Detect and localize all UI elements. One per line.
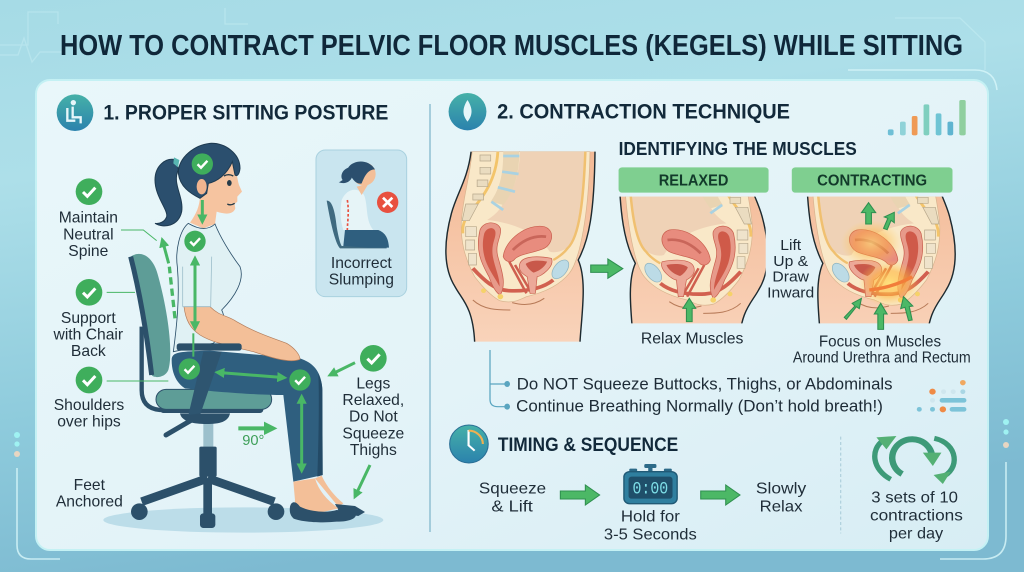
label: maintain neutral spine: Neutral (63, 226, 114, 243)
label: lift up and draw inward: Inward (767, 285, 814, 301)
icon: timer (624, 464, 677, 504)
reminder bullet list: Do NOT Squeeze Buttocks, Thighs, or Abdominals (517, 374, 893, 393)
label: shoulders over hips: over hips (57, 414, 121, 431)
label: 90 degrees: 90° (242, 433, 264, 449)
heading: contraction technique: 2. CONTRACTION TECHNIQUE (497, 99, 790, 123)
step: slowly relax: Relax (760, 498, 802, 516)
label: maintain neutral spine: Spine (68, 243, 109, 260)
label: lift up and draw inward: Draw (772, 269, 809, 286)
label: sets per day: contractions (870, 507, 963, 525)
anatomy: pelvis side view (446, 152, 595, 342)
arrow: relaxed up (683, 298, 696, 322)
icon: clock (450, 425, 488, 463)
annotation arrows (107, 200, 370, 497)
label: legs relaxed: Do Not (349, 409, 398, 426)
label: shoulders over hips: Shoulders (54, 397, 124, 414)
decorative chart bars (888, 100, 966, 135)
floor shadow (103, 507, 383, 533)
label: support with chair back: with Chair (53, 326, 123, 343)
label: focus on muscles: Around Urethra and Rectum (793, 350, 971, 367)
label: support with chair back: Support (61, 310, 116, 327)
heading: proper sitting posture: 1. PROPER SITTING POSTURE (103, 100, 388, 124)
arrow: step one (560, 485, 600, 505)
icon: repeat cycle (875, 436, 954, 484)
heading: timing and sequence: TIMING & SEQUENCE (498, 435, 678, 456)
checkmarks (76, 153, 387, 393)
callout: incorrect slumping (316, 150, 407, 297)
icon: timer: 0:00 (632, 480, 668, 499)
callout: incorrect slumping: Incorrect (331, 255, 392, 272)
label: legs relaxed: Legs (356, 375, 390, 392)
person (155, 143, 365, 522)
reminder bullet list: Continue Breathing Normally (Don’t hold breath!) (516, 396, 883, 415)
label: hold for seconds: 3-5 Seconds (604, 526, 697, 543)
callout: incorrect slumping: Slumping (329, 272, 394, 289)
step: squeeze and lift: & Lift (491, 498, 533, 516)
panel: proper sitting posture (53, 94, 407, 533)
arrow: to relaxed (591, 259, 623, 278)
step: slowly relax: Slowly (756, 480, 807, 497)
label: focus on muscles: Focus on Muscles (819, 334, 941, 351)
step: squeeze and lift: Squeeze (479, 480, 546, 497)
subheading: identifying the muscles: IDENTIFYING THE MUSCLES (619, 140, 857, 160)
label: support with chair back: Back (71, 343, 106, 360)
panel: main card (36, 80, 988, 550)
arrows: lifting up (844, 203, 913, 329)
divider (429, 104, 431, 532)
panel: reminders and timing (450, 350, 966, 543)
label: sets per day: per day (889, 525, 944, 542)
label: relax muscles: Relax Muscles (641, 331, 743, 347)
label: feet anchored: Anchored (56, 494, 123, 511)
divider dashed (839, 437, 842, 533)
label: relaxed (619, 167, 769, 193)
reminder bullet list (490, 350, 893, 415)
label: contracting (792, 167, 952, 193)
label: hold for seconds: Hold for (621, 508, 680, 526)
label: contracting: CONTRACTING (817, 173, 927, 190)
label: lift up and draw inward: Up & (773, 253, 808, 270)
label: maintain neutral spine: Maintain (59, 209, 118, 226)
label: legs relaxed: Relaxed, (342, 392, 404, 409)
label: feet anchored: Feet (74, 477, 106, 494)
chair (131, 254, 284, 528)
arrow: step two (701, 485, 740, 505)
anatomy: contracting (806, 196, 956, 324)
label: legs relaxed: Squeeze (342, 425, 405, 442)
label: legs relaxed: Thighs (350, 442, 397, 459)
label: sets per day: 3 sets of 10 (871, 489, 958, 507)
anatomy: relaxed (619, 196, 766, 324)
label: relaxed: RELAXED (659, 173, 728, 190)
icon: sitting person (57, 94, 93, 131)
decorative dots (917, 380, 966, 412)
panel: contraction technique (446, 93, 971, 367)
label: lift up and draw inward: Lift (780, 237, 802, 254)
icon: contraction (449, 93, 486, 130)
